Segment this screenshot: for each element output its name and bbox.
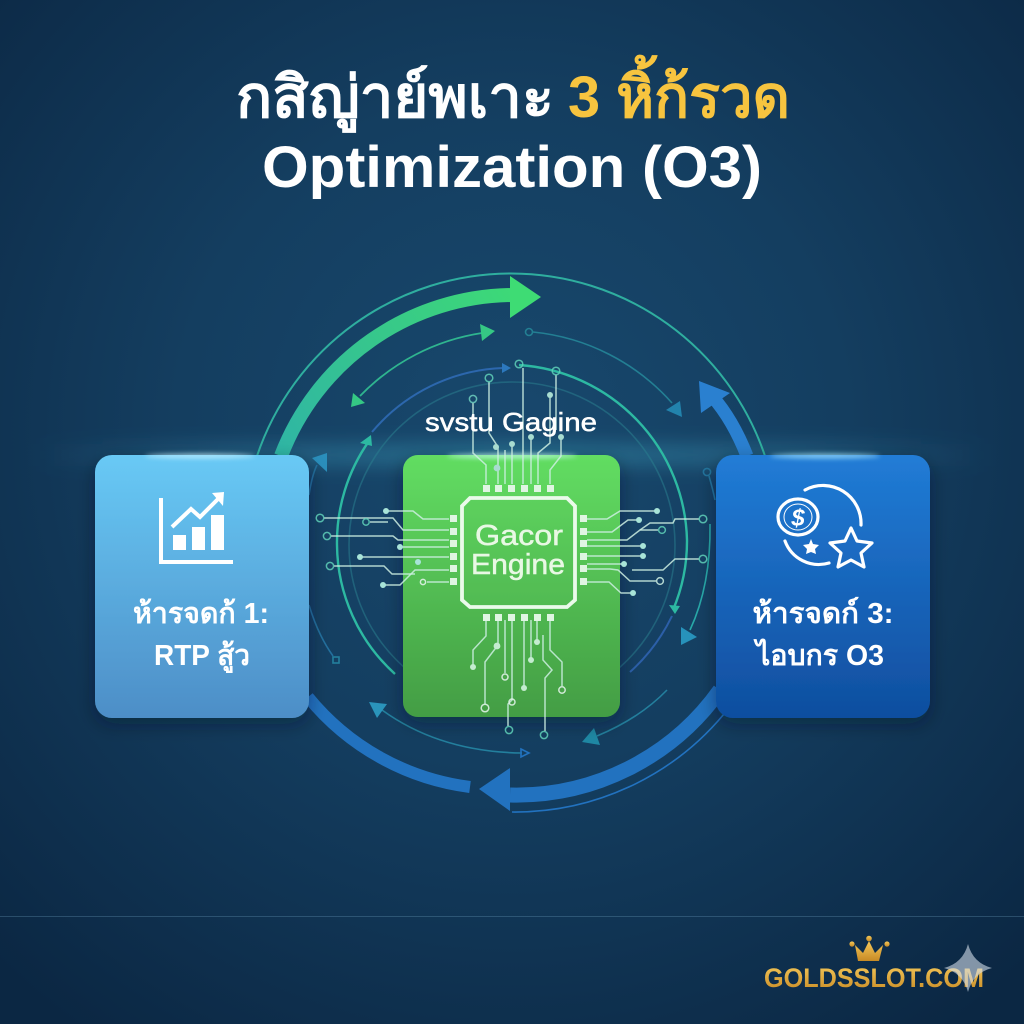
middle green arc arrow — [351, 324, 495, 407]
icon: sparkle — [944, 944, 992, 992]
title: Optimization (O3) — [262, 135, 762, 200]
engine heading: svstu Gagine — [425, 407, 597, 437]
icon: growth chart — [161, 492, 233, 562]
title: 3 หิ้ก้รวด — [568, 55, 790, 130]
right thin arcs — [681, 468, 715, 645]
icon: coin and star — [778, 485, 872, 567]
right card — [716, 455, 930, 718]
right traces — [587, 508, 707, 596]
right card text: ไอบกร O3 — [753, 638, 884, 672]
chip label: Gacor — [475, 520, 563, 552]
inner teal ring, right — [519, 365, 687, 610]
left card text: ห้ารจดก้ 1: — [133, 598, 269, 630]
left traces — [316, 508, 449, 588]
circular flow arrows — [257, 273, 765, 812]
inner teal ring, left — [337, 441, 395, 674]
left card — [95, 455, 309, 718]
left thin arcs — [309, 453, 339, 663]
title: กสิญู่าย์พเาะ — [236, 64, 554, 133]
left card text: RTP สู้ว — [154, 640, 250, 673]
chip circuit traces — [316, 360, 707, 739]
title — [236, 55, 790, 200]
right card text: ห้ารจดก์ 3: — [752, 596, 894, 630]
faint inner ring — [349, 382, 675, 708]
bottom traces — [470, 620, 565, 739]
lower thin blue arc — [512, 714, 724, 812]
lower thin arc arrows — [369, 690, 667, 757]
inner ring blue arrow — [372, 363, 511, 432]
center card — [403, 455, 620, 717]
left card text — [133, 598, 269, 673]
icon: coin and star: $ — [790, 505, 805, 532]
right card text — [752, 596, 894, 672]
chip label: Engine — [471, 549, 565, 581]
logo wordmark: GOLDSSLOT.COM — [764, 963, 984, 993]
glow band behind cards — [30, 444, 994, 466]
upper right blue arrow — [699, 381, 747, 456]
big blue arc, left — [308, 697, 470, 787]
chip label — [471, 520, 565, 581]
top traces — [469, 360, 564, 484]
chip outline — [462, 498, 575, 607]
big blue arrow, right — [479, 690, 720, 811]
outer thin ring — [257, 273, 765, 456]
big green arrow — [281, 276, 541, 456]
logo: goldsslot — [764, 936, 992, 993]
middle teal arc, upper right — [526, 328, 682, 417]
glow highlights on card tops — [145, 454, 880, 458]
chip pads — [450, 485, 587, 621]
icon: crown — [849, 936, 890, 961]
footer divider — [0, 916, 1024, 917]
